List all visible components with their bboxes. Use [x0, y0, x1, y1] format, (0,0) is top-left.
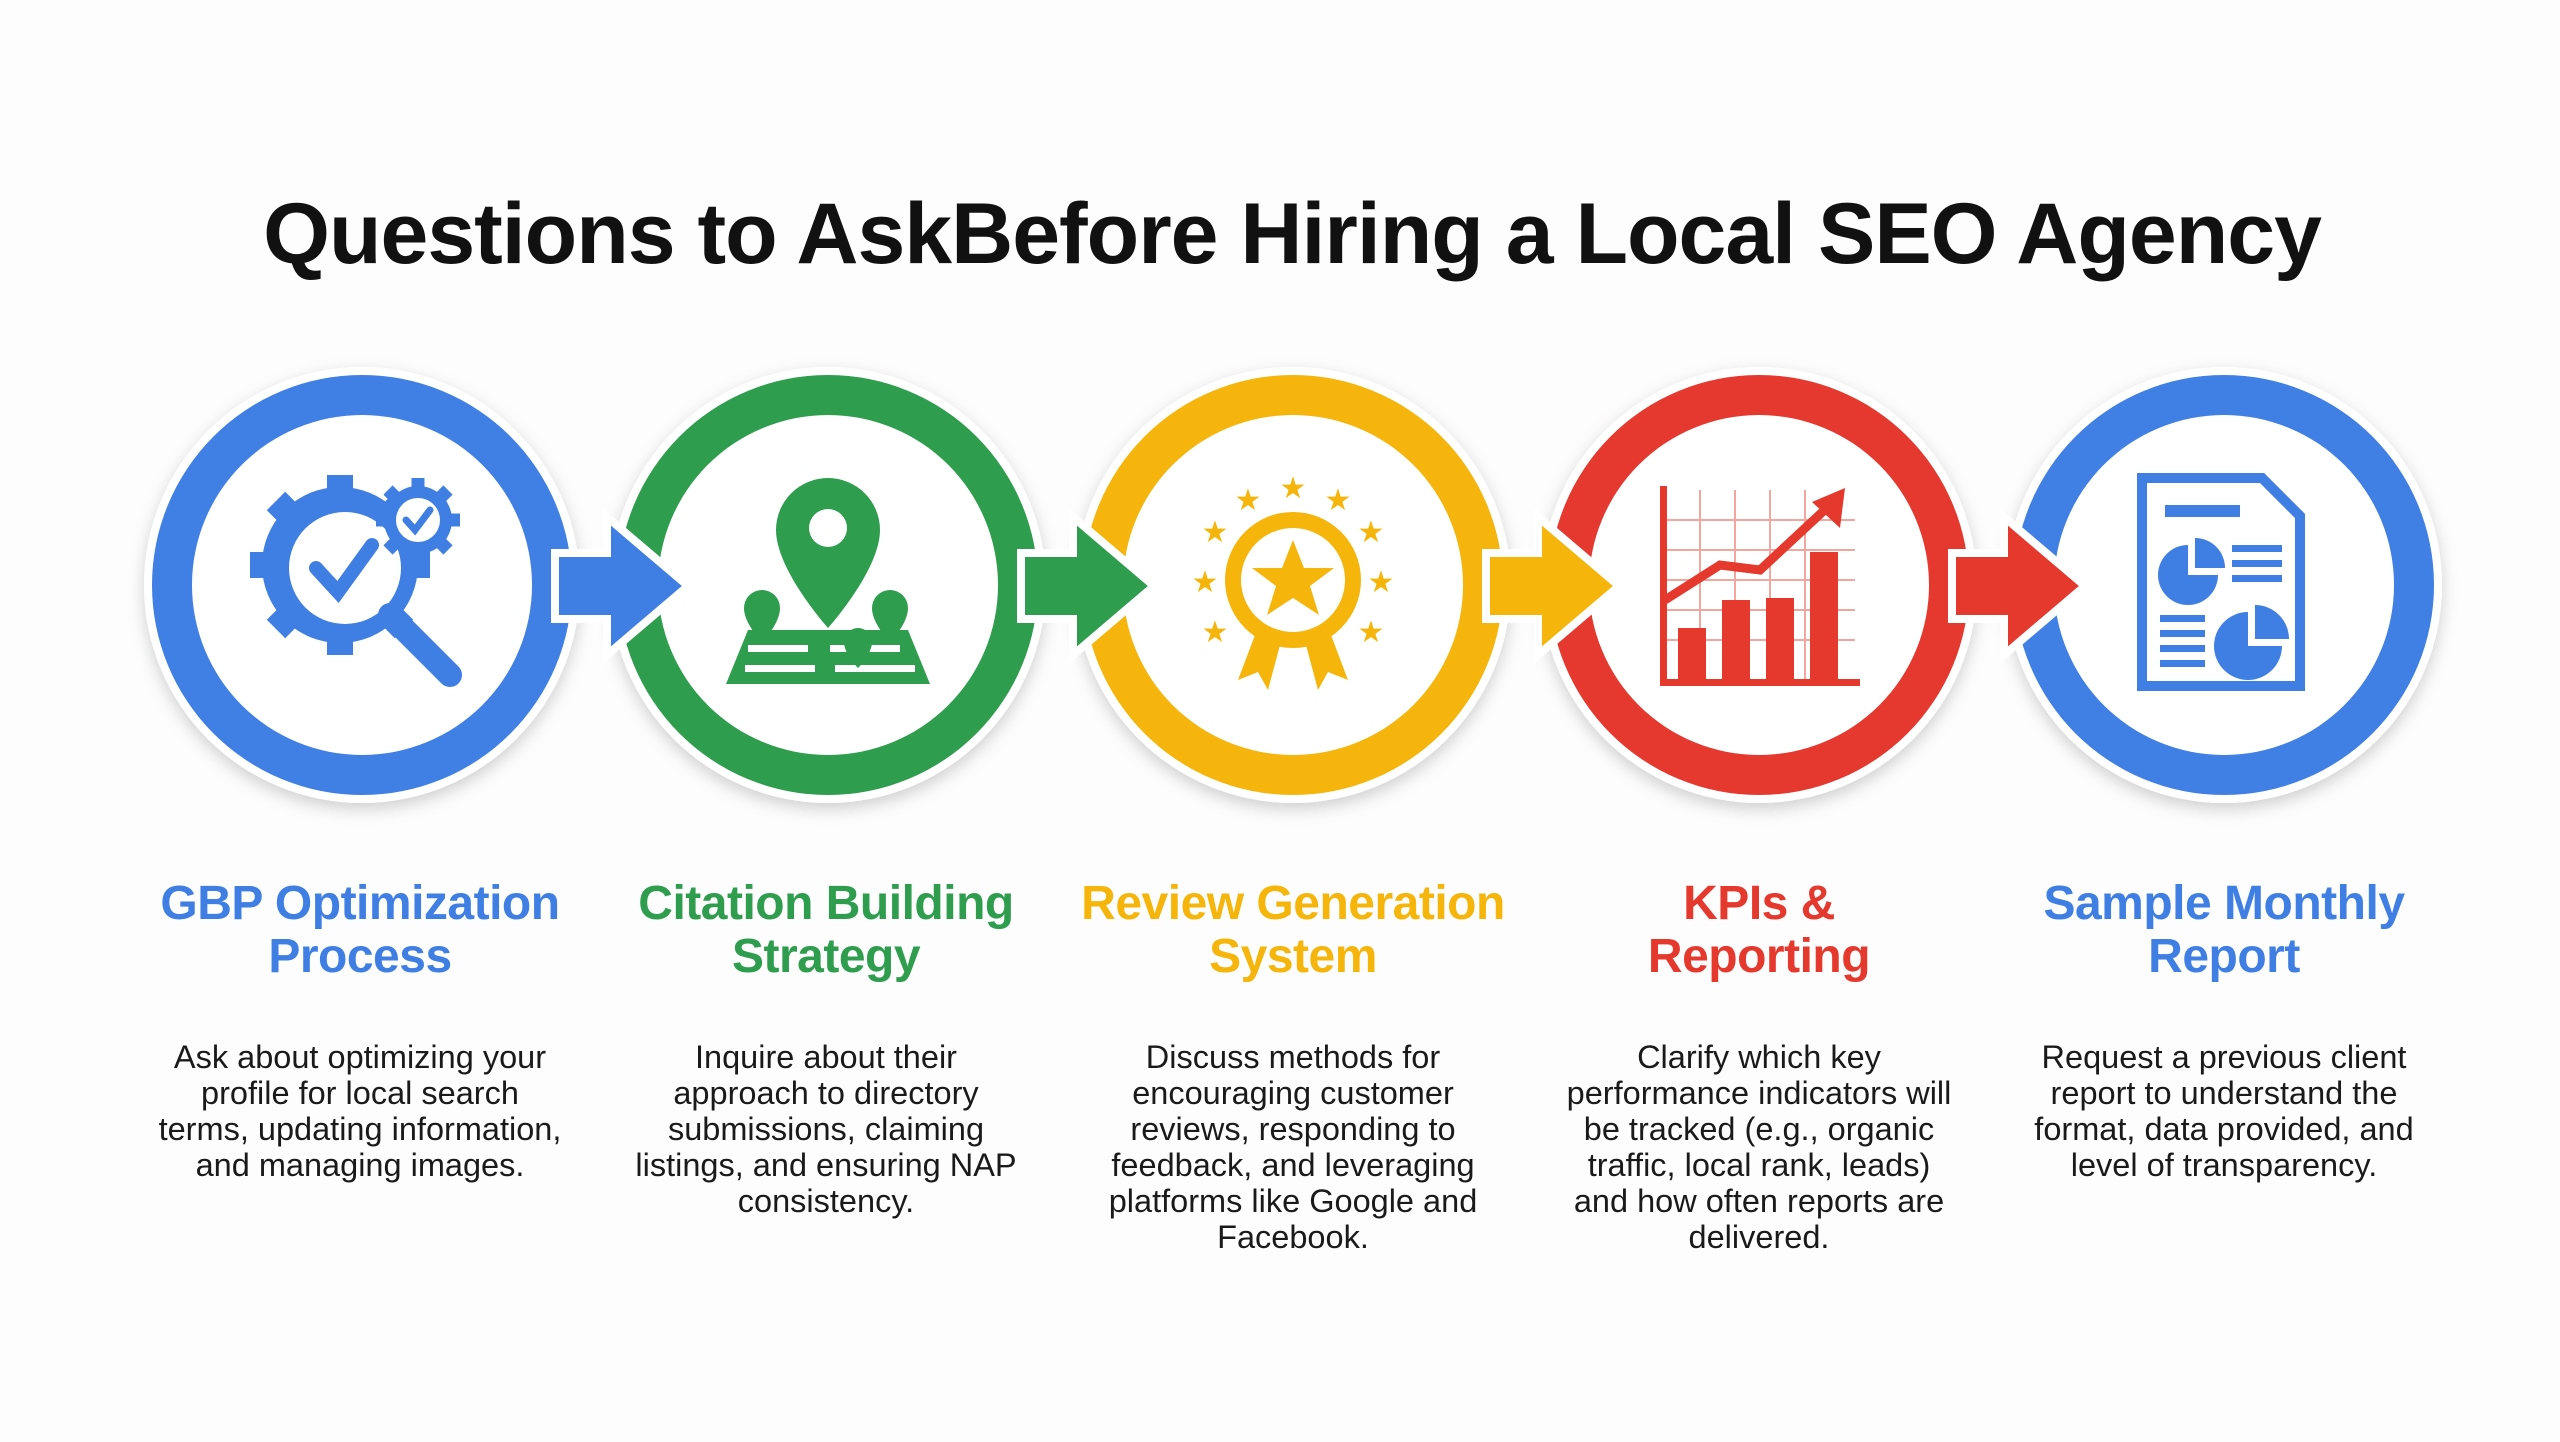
- icon: star badge: ★: [1368, 566, 1394, 599]
- icon: star badge: ★: [1325, 484, 1351, 517]
- column 4: KPIs: delivered.: [1689, 1219, 1829, 1255]
- column 3: review: platforms like Google and: [1109, 1183, 1477, 1219]
- column 4: KPIs: Reporting: [1648, 930, 1870, 983]
- column 5: sample report: report to understand the: [2051, 1075, 2397, 1111]
- column 3: review: Discuss methods for: [1146, 1039, 1440, 1075]
- icon: gear magnifier: [250, 475, 460, 675]
- column 1: GBP: Process: [268, 930, 452, 983]
- column 3: review: System: [1209, 930, 1377, 983]
- icon: star badge: ★: [1280, 472, 1306, 505]
- column 1: GBP: terms, updating information,: [159, 1111, 561, 1147]
- icon: star badge: ★: [1358, 616, 1384, 649]
- circle 4: red: [1541, 367, 1977, 803]
- column 3: review: reviews, responding to: [1130, 1111, 1456, 1147]
- arrow 2: [1021, 517, 1154, 655]
- column 3: review: encouraging customer: [1132, 1075, 1454, 1111]
- circle 3: yellow: [1075, 367, 1511, 803]
- icon: map pins: [726, 478, 930, 684]
- column 1: GBP: and managing images.: [196, 1147, 524, 1183]
- column 1: GBP: [159, 877, 561, 1183]
- column 5: sample report: Request a previous client: [2042, 1039, 2406, 1075]
- circle 2: green: [610, 367, 1046, 803]
- column 2: citation: Citation Building: [638, 877, 1014, 930]
- column 1: GBP: profile for local search: [201, 1075, 519, 1111]
- column 2: citation: submissions, claiming: [668, 1111, 984, 1147]
- column 5: sample report: [2034, 877, 2414, 1183]
- circle 1: blue: [144, 367, 580, 803]
- icon: star badge: ★: [1192, 566, 1218, 599]
- column 4: KPIs: KPIs &: [1683, 877, 1835, 930]
- icon: star badge: [1192, 472, 1394, 690]
- arrow 1: [555, 517, 688, 655]
- column 3: review: Review Generation: [1081, 877, 1505, 930]
- icon: star badge: ★: [1202, 616, 1228, 649]
- icon: bar chart: [1660, 486, 1860, 686]
- column 2: citation: Strategy: [732, 930, 920, 983]
- column 5: sample report: Report: [2148, 930, 2300, 983]
- column 2: citation: Inquire about their: [695, 1039, 957, 1075]
- icon: report document: [2142, 478, 2300, 686]
- arrow 3: [1486, 517, 1619, 655]
- column 2: citation: consistency.: [738, 1183, 914, 1219]
- column 4: KPIs: [1567, 877, 1951, 1255]
- title: Questions to AskBefore Hiring a Local SEO Agency: [263, 186, 2321, 282]
- column 4: KPIs: and how often reports are: [1574, 1183, 1944, 1219]
- icon: star badge: ★: [1235, 484, 1261, 517]
- column 5: sample report: level of transparency.: [2071, 1147, 2377, 1183]
- icon: star badge: ★: [1358, 516, 1384, 549]
- column 1: GBP: Ask about optimizing your: [174, 1039, 546, 1075]
- column 4: KPIs: Clarify which key: [1637, 1039, 1881, 1075]
- column 2: citation: [635, 877, 1017, 1219]
- column 2: citation: listings, and ensuring NAP: [635, 1147, 1017, 1183]
- arrow 4: [1952, 517, 2085, 655]
- icon: star badge: ★: [1202, 516, 1228, 549]
- column 5: sample report: Sample Monthly: [2043, 877, 2405, 930]
- column 5: sample report: format, data provided, and: [2034, 1111, 2414, 1147]
- column 3: review: feedback, and leveraging: [1111, 1147, 1475, 1183]
- column 2: citation: approach to directory: [673, 1075, 979, 1111]
- column 3: review: [1081, 877, 1505, 1255]
- column 3: review: Facebook.: [1217, 1219, 1369, 1255]
- column 4: KPIs: performance indicators will: [1567, 1075, 1951, 1111]
- circle 5: blue: [2006, 367, 2442, 803]
- column 4: KPIs: be tracked (e.g., organic: [1584, 1111, 1934, 1147]
- column 1: GBP: GBP Optimization: [160, 877, 560, 930]
- column 4: KPIs: traffic, local rank, leads): [1588, 1147, 1930, 1183]
